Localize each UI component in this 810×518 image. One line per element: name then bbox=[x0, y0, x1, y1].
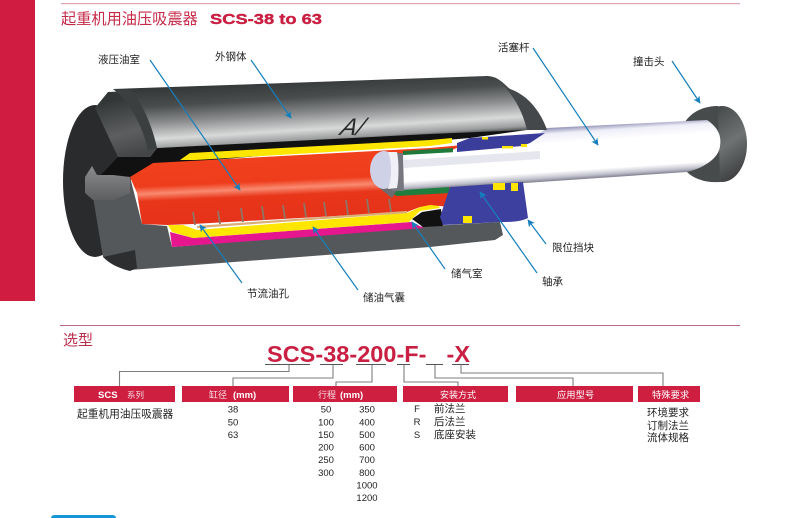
column: series: 系列 bbox=[127, 390, 144, 400]
column: stroke: 500 bbox=[359, 430, 375, 441]
column: stroke: 150 bbox=[318, 430, 334, 441]
centre bolt bbox=[85, 166, 130, 200]
column: stroke: 200 bbox=[318, 442, 334, 454]
magenta gas sleeve bbox=[170, 222, 424, 247]
piston shaft bbox=[403, 146, 522, 190]
column: special requirements bbox=[638, 386, 700, 444]
body shoulder left bbox=[113, 89, 157, 150]
callout: 液压油室 bbox=[98, 53, 240, 190]
column: mounting: 底座安装 bbox=[434, 428, 476, 441]
column: mounting: 后法兰 bbox=[434, 415, 466, 428]
column: series: SCS bbox=[98, 390, 118, 401]
callout: 储气室 bbox=[412, 222, 482, 280]
column: stroke bbox=[293, 386, 397, 504]
piston head bbox=[370, 151, 404, 198]
callout: 储气室: 储气室 bbox=[451, 267, 482, 280]
end face bbox=[63, 105, 127, 257]
column: bore: (mm) bbox=[233, 390, 256, 401]
yellow seals bbox=[463, 137, 527, 223]
callout: 外钢体: 外钢体 bbox=[215, 50, 247, 63]
column: bore: 63 bbox=[228, 430, 238, 441]
title: SCS-38 to 63 bbox=[210, 11, 322, 28]
column: special requirements: 流体规格 bbox=[647, 431, 689, 444]
callout: 液压油室: 液压油室 bbox=[98, 53, 140, 66]
column: mounting: F bbox=[414, 404, 420, 415]
callout: 储油气囊: 储油气囊 bbox=[363, 291, 405, 304]
grey cut section bbox=[93, 177, 503, 270]
column: stroke: 600 bbox=[359, 442, 375, 454]
column: bore: 缸径 bbox=[209, 389, 227, 400]
blue retainer upper bbox=[457, 133, 545, 152]
column: special requirements: 环境要求 bbox=[647, 406, 689, 419]
tan tube bbox=[197, 212, 407, 227]
top yellow liner bbox=[180, 138, 452, 160]
callout: 外钢体 bbox=[215, 50, 291, 118]
title: 起重机用油压吸震器 bbox=[61, 11, 198, 28]
gas chamber bbox=[412, 209, 443, 227]
column: series: 起重机用油压吸震器 bbox=[77, 408, 174, 420]
callout: 撞击头 bbox=[633, 55, 700, 103]
column: stroke: 400 bbox=[359, 418, 375, 428]
rod faint band bbox=[404, 151, 540, 168]
code connectors bbox=[120, 364, 663, 386]
blue bearing block bbox=[440, 182, 528, 225]
column: stroke: 800 bbox=[359, 468, 375, 479]
orifice ribs bbox=[193, 199, 391, 225]
column: bore: 50 bbox=[228, 418, 238, 428]
selection heading: 选型 bbox=[63, 332, 93, 349]
thread bottom bbox=[103, 250, 137, 271]
threaded neck bbox=[95, 91, 157, 157]
piston rod bbox=[403, 120, 720, 191]
column: mounting: S bbox=[414, 430, 420, 441]
green seal lower bbox=[377, 180, 450, 196]
impact head bbox=[685, 106, 747, 182]
callout: 限位挡块: 限位挡块 bbox=[552, 241, 594, 254]
green seal upper bbox=[403, 148, 453, 156]
column: stroke: (mm) bbox=[340, 390, 363, 401]
callout: 节流油孔: 节流油孔 bbox=[247, 287, 289, 300]
callout: 撞击头: 撞击头 bbox=[633, 55, 664, 68]
callout: 活塞杆 bbox=[498, 41, 598, 145]
column: bore: 38 bbox=[228, 404, 238, 416]
column: mounting: R bbox=[414, 417, 421, 428]
model code: SCS-38-200-F- -X bbox=[267, 341, 470, 367]
column: stroke: 700 bbox=[359, 455, 375, 466]
callout: 活塞杆: 活塞杆 bbox=[498, 41, 530, 54]
column: stroke: 350 bbox=[359, 404, 375, 416]
shock absorber cutaway illustration bbox=[63, 76, 747, 271]
callout: 储油气囊 bbox=[313, 227, 405, 304]
callout: 限位挡块 bbox=[528, 220, 594, 254]
red oil chamber bbox=[130, 145, 463, 225]
column: special requirements: 特殊要求 bbox=[652, 389, 689, 400]
inner black gap bbox=[98, 130, 527, 195]
column: special requirements: 订制法兰 bbox=[647, 419, 689, 432]
column: bore bbox=[182, 386, 289, 441]
column: application model: 应用型号 bbox=[557, 389, 594, 400]
yellow reservoir bbox=[168, 205, 440, 238]
column: mounting: 安装方式 bbox=[440, 389, 476, 400]
engraved lettering: A/ bbox=[335, 115, 370, 141]
column: stroke: 50 bbox=[321, 404, 331, 416]
column: stroke: 250 bbox=[318, 455, 334, 466]
callout: 节流油孔 bbox=[200, 225, 289, 300]
column: mounting bbox=[403, 386, 508, 441]
column: stroke: 300 bbox=[318, 468, 334, 479]
column: stroke: 行程 bbox=[318, 389, 336, 400]
column: stroke: 1200 bbox=[356, 493, 378, 504]
callout: 轴承: 轴承 bbox=[542, 275, 563, 288]
left red block bbox=[0, 0, 35, 301]
column: mounting: 前法兰 bbox=[434, 402, 466, 415]
title bbox=[61, 11, 322, 28]
cropped blue tab bbox=[51, 515, 116, 518]
outer steel body bbox=[113, 76, 547, 148]
column: application model bbox=[516, 386, 633, 402]
column: stroke: 100 bbox=[318, 418, 334, 428]
callout: 轴承 bbox=[480, 192, 563, 288]
body shoulder right bbox=[497, 80, 547, 130]
column: stroke: 1000 bbox=[356, 480, 378, 492]
column: series bbox=[74, 386, 175, 420]
